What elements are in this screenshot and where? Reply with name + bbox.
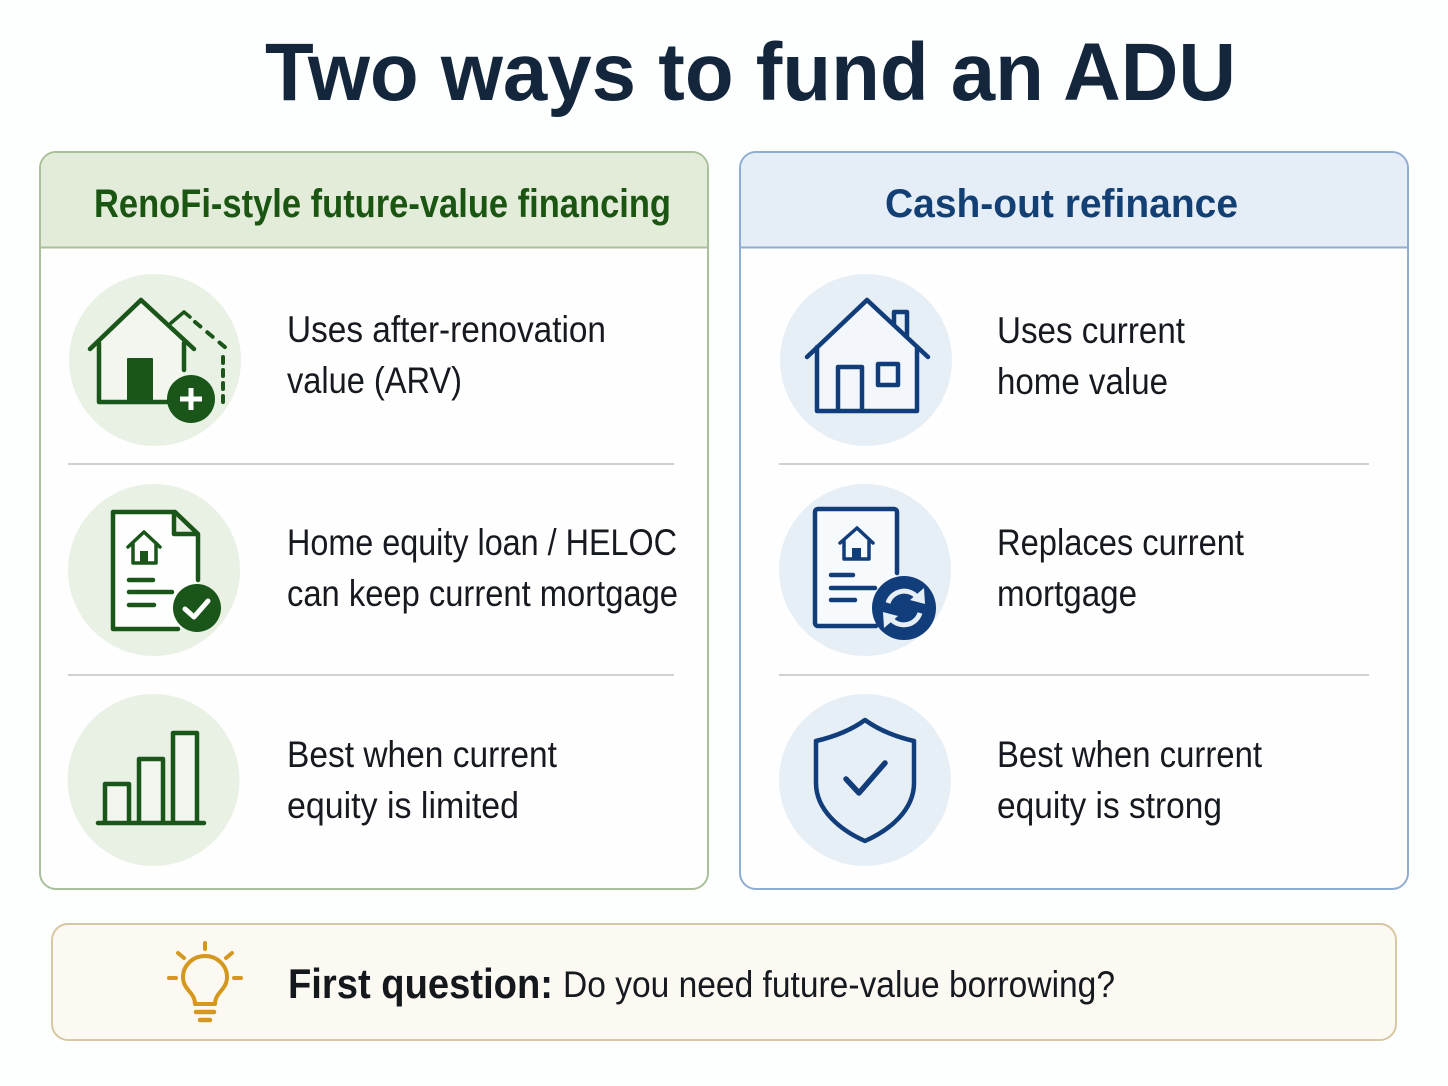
panel: Cash-out refinance — [740, 152, 1408, 889]
row: limited equity — [68, 694, 558, 866]
refresh arrows — [883, 588, 925, 628]
text: equity is strong — [997, 785, 1222, 826]
text: equity is limited — [287, 785, 519, 826]
text: First question: — [288, 960, 553, 1007]
text: Do you need future-value borrowing? — [563, 964, 1115, 1005]
text — [287, 734, 558, 826]
text: Home equity loan / HELOC — [287, 522, 677, 563]
text: home value — [997, 361, 1168, 402]
icon: light bulb — [169, 943, 241, 1020]
icon: house — [780, 274, 952, 446]
panel header: blue: Cash-out refinance — [885, 182, 1238, 226]
row: replaces mortgage — [779, 484, 1245, 656]
title: Two ways to fund an ADU — [265, 27, 1236, 118]
icon: bar chart — [68, 694, 240, 866]
text: value (ARV) — [287, 360, 462, 401]
text: Best when current — [997, 734, 1263, 775]
row: strong equity — [779, 694, 1263, 866]
text — [287, 522, 678, 614]
row: home equity loan — [68, 484, 678, 656]
icon: document with refresh — [779, 484, 951, 656]
panel header: green: RenoFi-style future-value financing — [94, 182, 671, 226]
row: current home value — [780, 274, 1186, 446]
icon: document with check — [68, 484, 240, 656]
icon: house with addition — [69, 274, 241, 446]
text — [997, 522, 1245, 614]
text — [997, 310, 1186, 402]
text: mortgage — [997, 573, 1137, 614]
callout: first question — [52, 924, 1396, 1040]
text — [288, 960, 1115, 1007]
text: Uses current — [997, 310, 1186, 351]
text — [997, 734, 1263, 826]
text: can keep current mortgage — [287, 573, 678, 614]
panel: RenoFi-style future-value financing — [40, 152, 708, 889]
text: Best when current — [287, 734, 558, 775]
text: Uses after-renovation — [287, 309, 606, 350]
text — [287, 309, 606, 401]
icon: shield with check — [779, 694, 951, 866]
row: after-renovation value — [69, 274, 606, 446]
panel header: green — [40, 153, 708, 248]
panel header: blue — [740, 153, 1408, 248]
text: Replaces current — [997, 522, 1245, 563]
